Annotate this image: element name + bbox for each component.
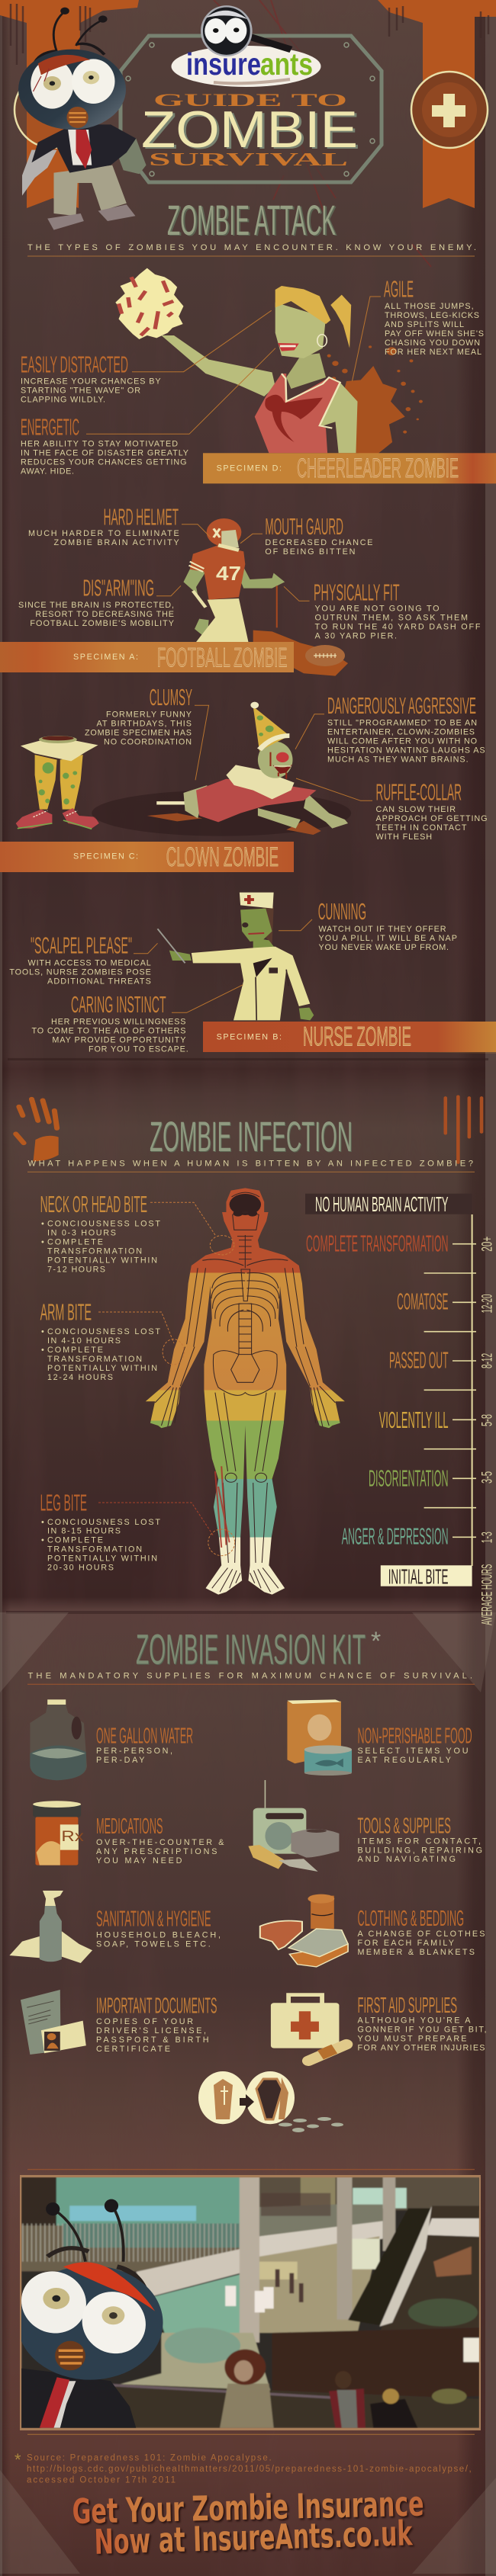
timeline: 3-5 xyxy=(480,1471,496,1484)
callout: agile: FOR HER NEXT MEAL xyxy=(385,348,482,357)
logo: insureants xyxy=(171,6,320,87)
callout: leg bite: 20-30 HOURS xyxy=(47,1564,114,1573)
callout: neck or head bite: COMPLETE xyxy=(47,1238,103,1247)
callout: sanitation: SOAP, TOWELS ETC. xyxy=(96,1940,211,1949)
callout: documents: CERTIFICATE xyxy=(96,2045,170,2054)
panel: zombie invasion kit: ONE GALLON WATER xyxy=(96,1724,193,1749)
callout: physically fit: A 30 YARD PIER. xyxy=(314,632,397,641)
callout: leg bite: LEG BITE xyxy=(40,1490,87,1516)
callout: mouth guard xyxy=(240,513,372,557)
callout: documents: DRIVER'S LICENSE, xyxy=(96,2026,206,2035)
callout: agile: PAY OFF WHEN SHE'S xyxy=(385,329,484,338)
timeline xyxy=(305,1192,496,1625)
callout: medications: ANY PRESCRIPTIONS xyxy=(96,1847,217,1856)
source note: accessed October 17th 2011 xyxy=(27,2476,176,2485)
panel: zombie infection xyxy=(16,1096,496,1625)
callout: energetic: IN THE FACE OF DISASTER GREATLY xyxy=(21,448,188,457)
callout: disarming: FOOTBALL ZOMBIE'S MOBILITY xyxy=(30,619,174,628)
callout: physically fit: OUTRUN THEM, SO ASK THEM xyxy=(314,614,468,623)
callout: arm bite: TRANSFORMATION xyxy=(47,1355,142,1364)
callout: dangerously aggressive xyxy=(295,692,485,765)
callout: water: PER-DAY xyxy=(96,1756,145,1765)
pom-pom xyxy=(115,268,183,339)
callout: scalpel please: "SCALPEL PLEASE" xyxy=(31,932,132,959)
illustration: clown torso xyxy=(92,702,351,836)
panel: zombie invasion kit xyxy=(9,1625,487,2061)
callout: neck or head bite: • xyxy=(41,1238,44,1247)
callout: leg bite: • xyxy=(41,1518,44,1527)
callout: medications xyxy=(96,1814,224,1865)
icon: medicine bottle xyxy=(33,1801,84,1865)
callout: dangerously aggressive: MUCH AS THEY WANT BRAINS. xyxy=(327,755,469,765)
callout: agile xyxy=(353,275,484,381)
timeline: 1-3 xyxy=(480,1532,496,1543)
call to action xyxy=(72,2484,424,2562)
callout: clumsy: FORMERLY FUNNY xyxy=(106,711,192,720)
callout: leg bite: • xyxy=(41,1536,44,1545)
callout: leg bite: TRANSFORMATION xyxy=(47,1545,142,1554)
callout: energetic: ENERGETIC xyxy=(21,414,79,441)
callout: easily distracted: STARTING "THE WAVE" OR xyxy=(21,386,140,395)
timeline: 20+ xyxy=(480,1237,496,1252)
callout: ruffle collar xyxy=(296,778,487,842)
source note: * xyxy=(14,2450,21,2469)
callout: clothing xyxy=(357,1907,485,1957)
callout: cunning: WATCH OUT IF THEY OFFER xyxy=(319,925,446,934)
callout: tools: AND NAVIGATING xyxy=(357,1855,456,1864)
photo: shopping mall with zombie ant xyxy=(17,2175,481,2430)
badge: left circle xyxy=(14,72,91,148)
callout: cunning: YOU NEVER WAKE UP FROM. xyxy=(319,943,449,952)
callout: neck or head bite: IN 0-3 HOURS xyxy=(47,1229,116,1238)
callout: leg bite: COMPLETE xyxy=(47,1536,103,1545)
badge: medical cross xyxy=(411,72,488,148)
jersey number: 47 xyxy=(216,562,241,585)
callout: clothing: A CHANGE OF CLOTHES xyxy=(357,1930,485,1939)
timeline: 5-8 xyxy=(480,1414,496,1426)
banner: specimen a: FOOTBALL ZOMBIE xyxy=(157,643,287,672)
banner: specimen d: SPECIMEN D: xyxy=(217,464,282,473)
callout: dangerously aggressive: STILL "PROGRAMMED" TO BE AN xyxy=(327,719,477,728)
banner: specimen c: CLOWN ZOMBIE xyxy=(166,842,279,872)
logo: insureants: insure xyxy=(186,47,261,82)
callout: agile: CHASING YOU DOWN xyxy=(385,338,480,348)
heading: zombie infection: WHAT HAPPENS WHEN A HUMAN IS BITTEN BY AN INFECTED ZOMBIE? xyxy=(27,1160,473,1169)
icon: documents xyxy=(21,1990,86,2055)
callout: caring instinct: FOR YOU TO ESCAPE. xyxy=(89,1045,188,1054)
banner: specimen b xyxy=(203,1022,496,1052)
callout: clothing: MEMBER & BLANKETS xyxy=(357,1948,475,1957)
callout: cunning xyxy=(279,898,457,952)
callout: physically fit: PHYSICALLY FIT xyxy=(314,579,400,606)
callout: arm bite: 12-24 HOURS xyxy=(47,1373,113,1382)
banner: specimen b: SPECIMEN B: xyxy=(217,1032,282,1041)
callout: scalpel please xyxy=(9,932,158,986)
icon: first aid kit xyxy=(271,1995,346,2061)
callout: easily distracted: CLAPPING WILDLY. xyxy=(21,395,105,404)
callout: first aid: ALTHOUGH YOU'RE A xyxy=(357,2016,471,2025)
callout: leg bite: CONCIOUSNESS LOST xyxy=(47,1518,160,1527)
panel: cheerleader zombie xyxy=(21,268,496,483)
callout: energetic: HER ABILITY TO STAY MOTIVATED xyxy=(21,439,178,448)
callout: easily distracted: INCREASE YOUR CHANCES BY xyxy=(21,377,161,386)
callout: dangerously aggressive: HESITATION WANTING LAUGHS AS xyxy=(327,746,485,755)
callout: water xyxy=(96,1724,193,1765)
icon: drip marks xyxy=(446,1096,482,1163)
zombie ant overlay xyxy=(17,2199,163,2428)
callout: disarming: DIS"ARM"ING xyxy=(83,575,154,601)
callout: hard helmet: ZOMBIE BRAIN ACTIVITY xyxy=(53,538,179,547)
callout: clumsy: CLUMSY xyxy=(150,684,192,711)
callout: scalpel please: WITH ACCESS TO MEDICAL xyxy=(27,958,151,967)
source note xyxy=(14,2450,472,2485)
callout: agile: AND SPLITS WILL xyxy=(385,320,464,329)
panel: zombie invasion kit: IMPORTANT DOCUMENTS xyxy=(96,1994,217,2019)
callout: documents: COPIES OF YOUR xyxy=(96,2017,193,2026)
plaque xyxy=(121,36,382,182)
source note: Source: Preparedness 101: Zombie Apocalypse. xyxy=(27,2454,272,2463)
title: SURVIVAL xyxy=(149,150,348,170)
callout: neck or head bite: CONCIOUSNESS LOST xyxy=(47,1220,160,1229)
callout: agile: THROWS, LEG-KICKS xyxy=(385,311,479,320)
callout: food: SELECT ITEMS YOU xyxy=(357,1747,469,1756)
callout: tools: BUILDING, REPAIRING xyxy=(357,1846,482,1855)
icons: supplies xyxy=(9,1699,352,2061)
callout: neck or head bite: TRANSFORMATION xyxy=(47,1247,142,1256)
panel: zombie invasion kit: SANITATION & HYGIENE xyxy=(96,1907,211,1932)
callout: hard helmet xyxy=(28,503,211,547)
panel: football zombie xyxy=(0,503,481,676)
callout: water: PER-PERSON, xyxy=(96,1747,172,1756)
illustration: cheerleader xyxy=(115,268,423,455)
icon: cereal box and can xyxy=(287,1699,352,1776)
diagram: human body and skeleton xyxy=(146,1188,345,1595)
icon: spray bottle and towel xyxy=(9,1891,92,1963)
heading: zombie attack xyxy=(27,196,476,256)
callout: ruffle collar: CAN SLOW THEIR xyxy=(375,805,456,814)
callout: first aid: FOR ANY OTHER INJURIES xyxy=(357,2043,485,2052)
callout: physically fit xyxy=(284,579,481,641)
callout: dangerously aggressive: WILL COME AFTER YOU WITH NO xyxy=(327,737,477,746)
title: ZOMBIE xyxy=(141,101,358,159)
icon: coffins xyxy=(198,2071,343,2132)
callout: arm bite: COMPLETE xyxy=(47,1346,103,1355)
heading: invasion kit: THE MANDATORY SUPPLIES FOR MAXIMUM CHANCE OF SURVIVAL. xyxy=(27,1672,472,1681)
title xyxy=(141,91,358,170)
callout: hard helmet: HARD HELMET xyxy=(104,503,179,530)
callout: leg bite xyxy=(40,1490,214,1573)
callout: mouth guard: DECREASED CHANCE xyxy=(265,538,372,547)
callout: neck or head bite: • xyxy=(41,1220,44,1229)
callout: clumsy: NO COORDINATION xyxy=(104,738,192,747)
icon: football xyxy=(305,645,345,666)
callout: medications: MEDICATIONS xyxy=(96,1814,163,1839)
panel: nurse zombie xyxy=(9,893,496,1054)
header blood streaks xyxy=(214,0,431,267)
timeline: 12-20 xyxy=(480,1294,496,1313)
callout: caring instinct: TO COME TO THE AID OF OTHERS xyxy=(32,1027,185,1036)
icon: handprint xyxy=(16,1099,59,1161)
source note: http://blogs.cdc.gov/publichealthmatters/2011/05/preparedness-101-zombie-apocalypse/, xyxy=(27,2465,472,2474)
callout: ruffle collar: APPROACH OF GETTING xyxy=(375,814,487,823)
callout: arm bite: • xyxy=(41,1327,44,1336)
callout: first aid xyxy=(357,1994,487,2052)
callout: ruffle collar: WITH FLESH xyxy=(375,832,432,842)
callout: clumsy: ZOMBIE SPECIMEN HAS xyxy=(85,729,192,738)
rule xyxy=(27,2433,475,2435)
callout: physically fit: TO RUN THE 40 YARD DASH OFF xyxy=(314,623,481,632)
callout: easily distracted: EASILY DISTRACTED xyxy=(21,351,128,377)
heading: invasion kit: * xyxy=(371,1627,381,1656)
callout: disarming: SINCE THE BRAIN IS PROTECTED, xyxy=(18,601,174,610)
callout: energetic xyxy=(21,348,275,476)
callout: neck or head bite: 7-12 HOURS xyxy=(47,1266,105,1275)
callout: hard helmet: MUCH HARDER TO ELIMINATE xyxy=(28,529,179,538)
icon: folded clothes xyxy=(260,1894,348,1967)
callout: arm bite: POTENTIALLY WITHIN xyxy=(47,1364,157,1373)
callout: energetic: REDUCES YOUR CHANCES GETTING xyxy=(21,457,186,467)
heading: zombie attack: THE TYPES OF ZOMBIES YOU MAY ENCOUNTER. KNOW YOUR ENEMY. xyxy=(27,243,476,252)
callout: tools: ITEMS FOR CONTACT, xyxy=(357,1837,481,1846)
callout: first aid: YOU MUST PREPARE xyxy=(357,2034,467,2043)
callout: medications: OVER-THE-COUNTER & xyxy=(96,1838,224,1847)
callout: disarming xyxy=(18,575,181,628)
callout: caring instinct: HER PREVIOUS WILLINGNESS xyxy=(51,1018,185,1027)
callout: caring instinct: CARING INSTINCT xyxy=(71,991,166,1018)
callout: scalpel please: TOOLS, NURSE ZOMBIES POSE xyxy=(9,967,151,977)
callout: sanitation: HOUSEHOLD BLEACH, xyxy=(96,1931,221,1940)
callout: arm bite xyxy=(40,1299,174,1382)
callout: leg bite: POTENTIALLY WITHIN xyxy=(47,1554,157,1564)
callout: neck or head bite xyxy=(40,1191,215,1275)
callout: cunning: YOU A PILL, IT WILL BE A NAP xyxy=(319,934,457,943)
timeline: 8-12 xyxy=(480,1353,496,1368)
heading: zombie infection xyxy=(27,1112,475,1172)
heading: invasion kit xyxy=(27,1625,475,1684)
callout: mouth guard: OF BEING BITTEN xyxy=(265,547,355,557)
logo: insureants: ants xyxy=(260,47,313,82)
heading: zombie attack: ZOMBIE ATTACK xyxy=(167,196,336,244)
callout: disarming: RESORT TO DECREASING THE xyxy=(35,610,174,619)
callout: sanitation xyxy=(96,1907,221,1949)
callout: food xyxy=(357,1724,472,1765)
callout: scalpel please: ADDITIONAL THREATS xyxy=(47,977,151,986)
illustration: clown legs xyxy=(16,736,99,829)
callout: documents xyxy=(96,1994,217,2054)
callout: agile: AGILE xyxy=(384,275,414,302)
ribbons xyxy=(0,0,496,208)
callout: cunning: CUNNING xyxy=(318,898,366,925)
callout: dangerously aggressive: ENTERTAINER, CLOWN-ZOMBIES xyxy=(327,728,475,737)
callout: ruffle collar: TEETH IN CONTACT xyxy=(375,823,467,832)
banner: specimen c: SPECIMEN C: xyxy=(73,852,138,861)
callout: agile: ALL THOSE JUMPS, xyxy=(385,302,474,311)
banner: specimen a: SPECIMEN A: xyxy=(73,653,138,662)
callout: arm bite: CONCIOUSNESS LOST xyxy=(47,1327,160,1336)
callout: mouth guard: MOUTH GAURD xyxy=(265,513,343,540)
mascot: zombie ant xyxy=(18,8,147,230)
callout: documents: PASSPORT & BIRTH xyxy=(96,2035,209,2045)
icon: radio, tape and knife xyxy=(248,1780,339,1872)
callout: food: EAT REGULARLY xyxy=(357,1756,451,1765)
callout: clumsy: AT BIRTHDAYS, THIS xyxy=(96,720,192,729)
callout: clumsy xyxy=(85,684,209,780)
icon: water jug xyxy=(30,1699,87,1780)
timeline: AVERAGE HOURS xyxy=(480,1564,496,1625)
callout: clothing: FOR EACH FAMILY xyxy=(357,1939,454,1948)
callout: arm bite: IN 4-10 HOURS xyxy=(47,1336,121,1346)
illustration: football player xyxy=(183,518,348,676)
illustration: nurse xyxy=(157,893,314,1020)
panel: clown zombie xyxy=(0,684,487,872)
callout: arm bite: • xyxy=(41,1346,44,1355)
banner: specimen d xyxy=(203,453,496,483)
callout: easily distracted xyxy=(21,310,272,404)
icon: medicine bottle: Rx xyxy=(61,1827,84,1844)
callout: arm bite: ARM BITE xyxy=(40,1299,92,1326)
callout: first aid: GONNER IF YOU GET BIT, xyxy=(357,2025,487,2034)
callout: caring instinct: MAY PROVIDE OPPORTUNITY xyxy=(52,1036,185,1045)
rule xyxy=(27,2169,475,2170)
callout: neck or head bite: NECK OR HEAD BITE xyxy=(40,1191,147,1217)
banner: specimen c xyxy=(0,842,294,872)
callout: physically fit: YOU ARE NOT GOING TO xyxy=(314,605,440,614)
callout: medications: YOU MAY NEED xyxy=(96,1856,182,1865)
callout: leg bite: IN 8-15 HOURS xyxy=(47,1527,121,1536)
callout: neck or head bite: POTENTIALLY WITHIN xyxy=(47,1256,157,1266)
callout: energetic: AWAY. HIDE. xyxy=(21,467,74,476)
title: GUIDE TO xyxy=(153,91,347,110)
callout: tools xyxy=(357,1814,482,1864)
callout: caring instinct xyxy=(32,985,243,1054)
banner: specimen a xyxy=(0,642,294,672)
